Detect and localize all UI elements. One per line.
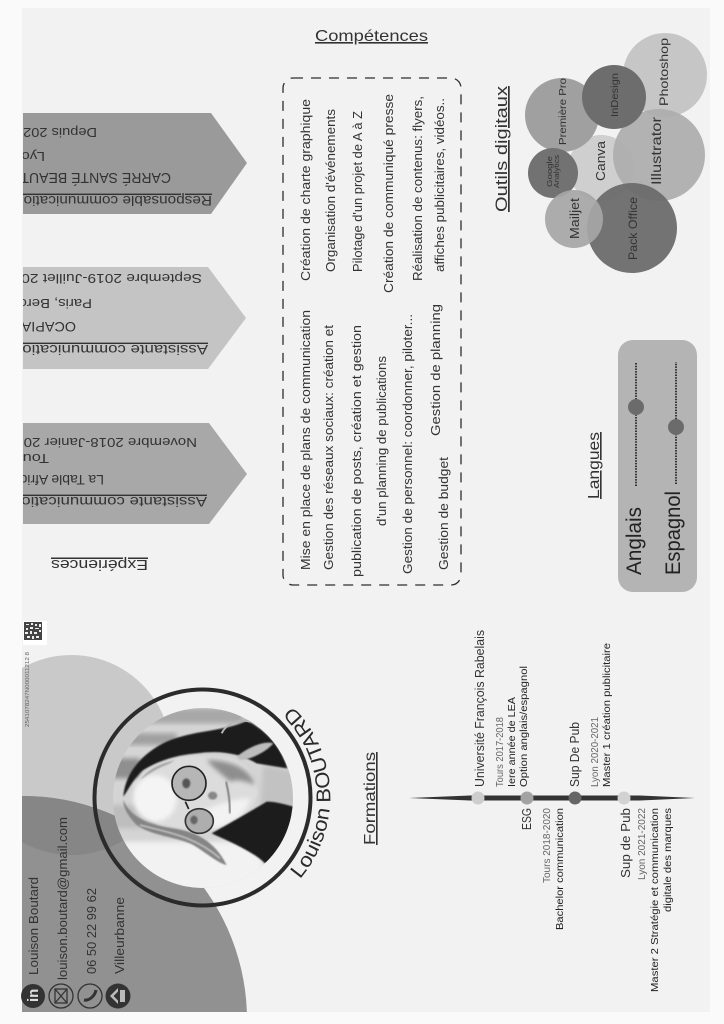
- formation: Sup De Pub 2020: Master 1 création publicitaire: [601, 643, 613, 787]
- formation: Sup de Pub 2021: Sup de Pub: [618, 808, 633, 878]
- heading: Compétences: Compétences: [315, 28, 428, 45]
- bubble labels: Google: [545, 156, 554, 187]
- bubble labels: Pack Office: [626, 197, 640, 260]
- arrow: La Table Afrique: Assistante communication: [12, 494, 207, 510]
- skills left column: Gestion des réseaux sociaux: création et: [322, 324, 336, 570]
- heading: Outils digitaux: Outils digitaux: [492, 85, 511, 212]
- arrow: La Table Afrique: La Table Afrique: [4, 472, 104, 488]
- formation: ESG: Tours 2018-2020: [541, 808, 553, 883]
- language: Espagnol: Espagnol: [662, 491, 685, 575]
- heading: Expériences: Expériences: [51, 556, 148, 573]
- icon: linkedin: in: [25, 989, 42, 1002]
- bubble: Illustrator: [613, 109, 705, 201]
- skills right column: Organisation d'événements: [324, 109, 338, 272]
- icon: home: [106, 984, 130, 1008]
- skills left column: Mise en place de plans de communication: [299, 310, 313, 570]
- skills left column: Gestion de personnel: coordonner, piloter...: [401, 314, 415, 574]
- formation: Université François Rabelais: [472, 630, 530, 787]
- photo portrait: [113, 708, 293, 888]
- skills right column: [299, 94, 447, 293]
- contact phone: 06 50 22 99 62: [84, 888, 99, 974]
- bubble labels: Analytics: [552, 155, 561, 188]
- skills right column: Création de charte graphique: [299, 99, 313, 281]
- arrow: OCAPIAT: OCAPIAT: [14, 319, 76, 335]
- bubble labels: Première Pro: [557, 78, 569, 145]
- bubble labels: Canva: [593, 140, 608, 181]
- formation: Sup de Pub 2021: Master 2 Stratégie et communication: [649, 808, 661, 992]
- formation: ESG: [520, 808, 566, 930]
- arrow: Carré Santé Beauté: Depuis 2022: [15, 125, 97, 140]
- name on arc: Louison BOUTARD: [286, 710, 330, 878]
- timeline: [409, 792, 695, 804]
- skills right column: Création de communiqué presse: [382, 94, 396, 293]
- panel: skills box: [283, 78, 461, 585]
- arrow: OCAPIAT: Paris, Bercy: [11, 296, 92, 311]
- panel: contact: [21, 817, 130, 1008]
- arrow: La Table Afrique: Tours: [8, 451, 49, 466]
- dark blob: [22, 796, 247, 1012]
- timeline bar: [409, 796, 695, 800]
- arrow: La Table Afrique: [4, 423, 247, 524]
- bubble labels: [545, 38, 671, 260]
- formation: ESG: Bachelor communication: [554, 808, 566, 930]
- skills right column: Réalisation de contenus: flyers,: [411, 96, 425, 281]
- arrow: OCAPIAT: [4, 267, 246, 369]
- formation: Sup de Pub 2021: digitale des marques: [662, 808, 674, 912]
- bubble labels: Mailjet: [567, 198, 582, 239]
- heading: Langues: Langues: [586, 432, 603, 499]
- contact city: Villeurbanne: [112, 897, 127, 974]
- skills left column: Gestion de budget: [437, 456, 451, 570]
- icon: phone: [78, 984, 102, 1008]
- panel: header blobs: [22, 655, 247, 1012]
- blob overlap: [22, 796, 123, 855]
- language: Espagnol: [662, 362, 685, 575]
- chart: tool bubbles: [525, 33, 707, 273]
- skills right column: Pilotage d'un projet de A à Z: [351, 111, 365, 272]
- contact name: Louison Boutard: [26, 877, 41, 975]
- skills left column: Gestion de planning: [429, 304, 443, 436]
- bubble: Mailjet: [545, 190, 603, 248]
- arrow: La Table Afrique: Novembre 2018-Janier 2019: [7, 435, 197, 450]
- QR code: [23, 621, 47, 645]
- registration code: 2541078247N000011212 8: [25, 652, 31, 727]
- bubble: Google Analytics: [528, 148, 578, 198]
- formation: Université François Rabelais: Iere année de LEA: [506, 697, 518, 787]
- arrow: Carré Santé Beauté: [11, 113, 247, 214]
- skills right column: affiches publicitaires, vidéos..: [433, 98, 447, 272]
- arrow: OCAPIAT: Assistante communication: [13, 342, 208, 358]
- arrow: OCAPIAT: Septembre 2019-Juillet 2020: [4, 271, 202, 286]
- light blob: [22, 655, 171, 855]
- contact email: louison.boutard@gmail.com: [55, 817, 70, 980]
- formation: Sup De Pub 2020: [567, 643, 613, 787]
- formation: Sup de Pub 2021: [618, 808, 674, 992]
- skills left column: publication de posts, création et gestion: [350, 325, 364, 577]
- bubble: Photoshop: [623, 33, 707, 117]
- bubble: Première Pro: [525, 78, 599, 152]
- timeline dots: [472, 792, 630, 804]
- formation: Sup de Pub 2021: Lyon 2021-2022: [636, 808, 648, 880]
- language: Anglais: Anglais: [623, 507, 646, 575]
- formation: Université François Rabelais: Tours 2017-2018: [494, 717, 506, 787]
- formation: Université François Rabelais: Option anglais/espagnol: [518, 666, 530, 787]
- bubble: InDesign: [582, 65, 646, 129]
- skills left column: d'un planning de publications: [375, 356, 389, 526]
- skills left column: [299, 304, 451, 577]
- bubble labels: InDesign: [610, 73, 621, 117]
- bubble: Canva: [568, 135, 634, 201]
- bubble labels: Illustrator: [648, 117, 664, 185]
- panel: languages: [618, 340, 697, 592]
- formation: Sup De Pub 2020: Lyon 2020-2021: [589, 717, 601, 787]
- bubble: Pack Office: [587, 183, 677, 273]
- panel: experience arrows: [4, 113, 247, 524]
- icon: linkedin: [21, 984, 45, 1008]
- formation: Université François Rabelais: Université François Rabelais: [472, 630, 487, 787]
- icon: mail: [49, 984, 73, 1008]
- formation: Sup De Pub 2020: Sup De Pub: [567, 722, 582, 787]
- arrow: Carré Santé Beauté: Lyon: [13, 149, 45, 164]
- photo ring: [94, 690, 310, 906]
- arrow: Carré Santé Beauté: Responsable communication: [15, 193, 212, 209]
- heading: Formations: Formations: [362, 752, 379, 845]
- language: Anglais: [623, 362, 646, 575]
- arrow: Carré Santé Beauté: CARRÉ SANTÉ BEAUTÉ: [11, 169, 171, 186]
- formation: ESG: ESG: [520, 808, 534, 830]
- bubble labels: Photoshop: [657, 38, 671, 106]
